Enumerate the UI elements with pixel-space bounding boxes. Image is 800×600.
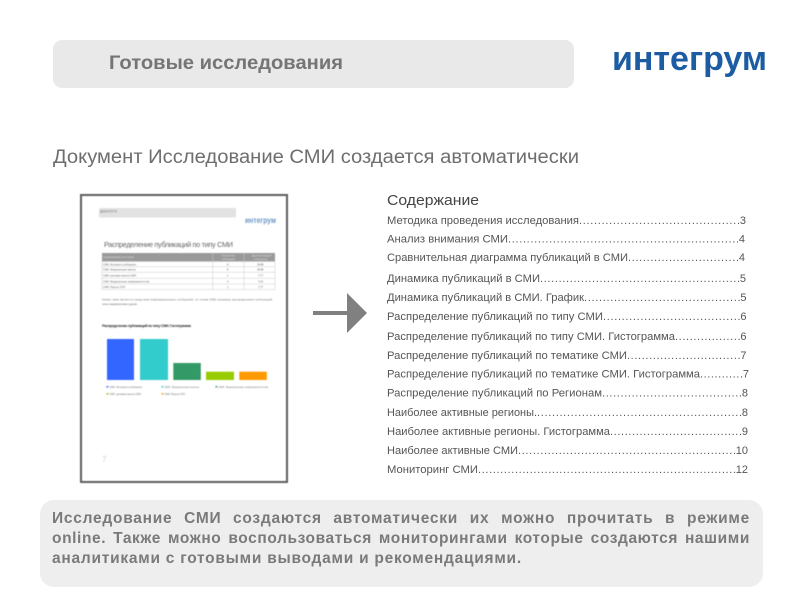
thumbnail legend: СМИ: Федеральная пресса [164, 385, 200, 389]
table of contents [387, 193, 749, 476]
logo: интегрум: интегрум [612, 40, 767, 78]
thumbnail table: 7,54 [258, 280, 264, 284]
thumbnail paragraph: типы и журналистика и другие [102, 303, 138, 306]
thumbnail bar chart [107, 339, 267, 380]
table of contents: ........................................................... [518, 445, 736, 457]
table of contents: Распределение публикаций по Регионам [387, 388, 602, 400]
table of contents: 9 [742, 426, 748, 438]
thumbnail legend: СМИ: деловая пресса СМИ [109, 392, 141, 396]
thumbnail table: Количество [222, 254, 236, 258]
thumbnail table: 1 [227, 274, 229, 278]
contents heading: Содержание [387, 193, 479, 209]
table of contents: Распределение публикаций по тематике СМИ [387, 350, 627, 362]
thumbnail table: 7,77 [258, 274, 264, 278]
table of contents: .............................. [628, 252, 739, 264]
bottom callout: Исследование СМИ создаются автоматически их можно прочитать в режиме [52, 510, 750, 527]
thumbnail chart title: Распределение публикаций по типу СМИ. Гистограмма [102, 324, 192, 328]
thumbnail legend: СМИ: Федеральные информагентства [218, 385, 269, 389]
thumbnail table: СМИ: Пресса ТОП [103, 285, 125, 289]
thumbnail table: СМИ: Интернет-сообщения [103, 262, 137, 266]
thumbnail paragraph [102, 298, 272, 306]
table of contents: 6 [740, 311, 746, 323]
thumbnail title: Распределение публикаций по типу СМИ [104, 240, 233, 249]
table of contents: 8 [742, 407, 748, 419]
table of contents: Наиболее активные регионы. Гистограмма [387, 426, 611, 438]
table of contents: .................................... [610, 426, 742, 438]
table of contents: Динамика публикаций в СМИ [387, 273, 540, 285]
table of contents: 4 [739, 234, 745, 246]
bottom callout: аналитиками с готовыми выводами и рекомендациями. [52, 550, 522, 567]
bottom callout: online. Также можно воспользоваться мониторингами которые создаются нашими [52, 530, 750, 547]
table of contents: .............................................................. [508, 234, 739, 246]
table of contents: 8 [742, 388, 748, 400]
bottom callout [40, 500, 763, 587]
document thumbnail [81, 195, 287, 482]
table of contents: 7 [740, 350, 746, 362]
table of contents: Наиболее активные СМИ [387, 445, 518, 457]
table of contents: 5 [740, 273, 746, 285]
document thumbnail: ДИАЛОГИ [100, 210, 117, 214]
thumbnail table: Доля публикаций [252, 254, 272, 258]
thumbnail table: СМИ: Федеральная пресса [103, 268, 136, 272]
thumbnail table: 8 [227, 268, 229, 272]
heading: Готовые исследования [109, 52, 343, 74]
thumbnail table: 1 [227, 285, 229, 289]
thumbnail table: 8 [227, 262, 229, 266]
thumbnail table [102, 253, 275, 290]
thumbnail page number: 7 [102, 455, 107, 464]
table of contents: Динамика публикаций в СМИ. График [387, 292, 584, 304]
table of contents: Распределение публикаций по типу СМИ [387, 311, 603, 323]
table of contents: ............ [700, 368, 743, 380]
table of contents: ....................................................... [537, 407, 742, 419]
table of contents: 4 [739, 252, 745, 264]
thumbnail header [99, 208, 236, 218]
document subtitle: Документ Исследование СМИ создается автоматически [53, 147, 579, 168]
table of contents: ........................................... [579, 215, 740, 227]
table of contents: Методика проведения исследования [387, 215, 579, 227]
table of contents: Наиболее активные регионы. [387, 407, 537, 419]
table of contents: Мониторинг СМИ [387, 464, 478, 476]
thumbnail legend: СМИ: Пресса ТОП [164, 392, 185, 396]
thumbnail table: в процентах [254, 258, 268, 261]
thumbnail table: СМИ: деловая пресса СМИ [103, 274, 136, 278]
thumbnail table: Наименование источника [103, 255, 134, 259]
table of contents: ..................................... [603, 311, 740, 323]
table of contents: .................. [675, 331, 740, 343]
table of contents: 12 [736, 464, 748, 476]
thumbnail logo: интегрум [245, 216, 276, 225]
thumbnail paragraph: Новая тема является средством информационных сообщений, по типам СМИ показаны распределения публикаций [102, 298, 272, 302]
table of contents: 7 [743, 368, 749, 380]
table of contents: .......................................... [584, 292, 740, 304]
table of contents: Анализ внимания СМИ [387, 234, 508, 246]
thumbnail table: СМИ: Федеральные информагентства [103, 280, 150, 284]
thumbnail legend: СМИ: Интернет-сообщения [109, 385, 143, 389]
table of contents: 10 [736, 445, 748, 457]
table of contents: 3 [740, 215, 746, 227]
table of contents: ...................................................... [540, 273, 740, 285]
thumbnail legend [106, 385, 269, 396]
thumbnail table: публикаций [222, 258, 236, 261]
thumbnail table: 7,77 [258, 285, 264, 289]
table of contents: Сравнительная диаграмма публикаций в СМИ [387, 252, 628, 264]
thumbnail table: 38,88 [257, 262, 264, 266]
arrow [313, 293, 367, 333]
table of contents: 6 [740, 331, 746, 343]
table of contents: ............................... [627, 350, 740, 362]
header bar [53, 40, 574, 88]
table of contents: Распределение публикаций по тематике СМИ. Гистограмма [387, 368, 701, 380]
table of contents: Распределение публикаций по типу СМИ. Гистограмма [387, 331, 676, 343]
table of contents: ...................................... [602, 388, 742, 400]
table of contents: 5 [740, 292, 746, 304]
thumbnail table: 4 [227, 280, 229, 284]
thumbnail table: 38,88 [257, 268, 264, 272]
table of contents: ...................................................................... [478, 464, 736, 476]
